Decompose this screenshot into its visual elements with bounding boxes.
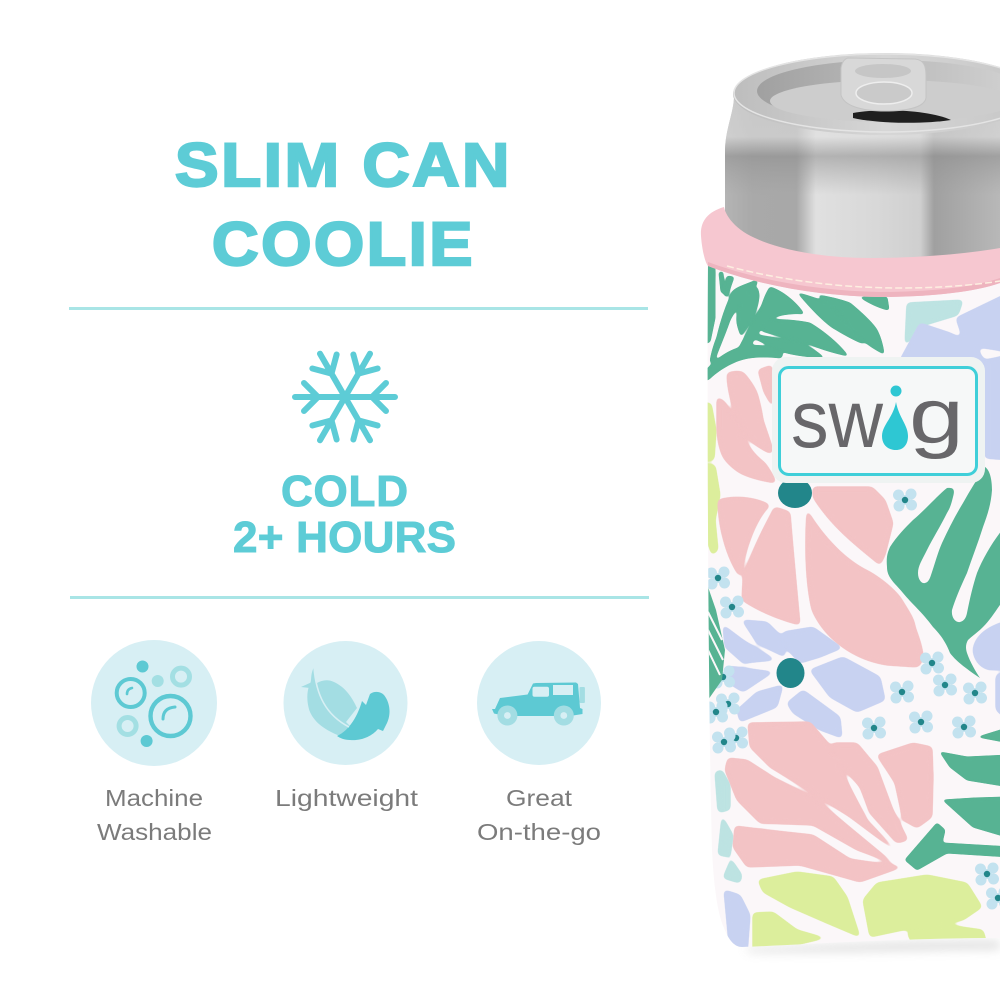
icon: lightweight feather xyxy=(284,641,408,765)
label: lightweight: Lightweight xyxy=(275,785,419,811)
left aqua and lavender shapes xyxy=(715,770,742,883)
pink collar xyxy=(701,207,1000,297)
bottom pale green leaves xyxy=(753,872,987,955)
left pale green shapes xyxy=(708,402,720,554)
product photo: can in coolie xyxy=(700,53,1000,960)
swig wordmark: g xyxy=(909,372,964,460)
cold duration text: COLD xyxy=(281,467,408,516)
large green leaf xyxy=(887,467,1000,678)
flower centre xyxy=(778,482,812,508)
icon: great on-the-go vehicle xyxy=(477,641,601,765)
can body xyxy=(725,98,1000,265)
left striped leaf xyxy=(708,587,725,700)
upper lavender and aqua shapes xyxy=(905,300,963,345)
cold duration text xyxy=(233,467,456,562)
can pull tab xyxy=(841,58,926,111)
label: great on-the-go: On-the-go xyxy=(477,819,601,845)
coolie body with floral print xyxy=(700,250,1000,960)
swig wordmark: sw xyxy=(791,374,884,465)
cold duration text: 2+ HOURS xyxy=(233,513,456,562)
label: great on-the-go xyxy=(477,785,601,845)
label: great on-the-go: Great xyxy=(506,785,573,811)
title: COOLIE xyxy=(212,210,475,278)
label: machine washable: Washable xyxy=(97,819,212,845)
label: machine washable xyxy=(97,785,212,845)
swig wordmark xyxy=(791,372,964,465)
large pink flower xyxy=(717,365,923,667)
title xyxy=(175,131,512,278)
lavender flower xyxy=(723,620,885,738)
swig logo badge xyxy=(772,357,985,483)
top green fronds xyxy=(700,265,889,380)
label: machine washable: Machine xyxy=(105,785,203,811)
title: SLIM CAN xyxy=(175,131,512,199)
small blue flowers xyxy=(704,488,1000,910)
lower right green leaves xyxy=(905,727,1000,870)
flower centre xyxy=(776,658,804,688)
icon: snowflake xyxy=(295,347,395,447)
lower pink flower xyxy=(725,722,933,882)
can rim and lid xyxy=(733,53,1000,135)
icon: machine washable bubbles xyxy=(91,640,217,766)
shadow under coolie xyxy=(745,941,1000,952)
